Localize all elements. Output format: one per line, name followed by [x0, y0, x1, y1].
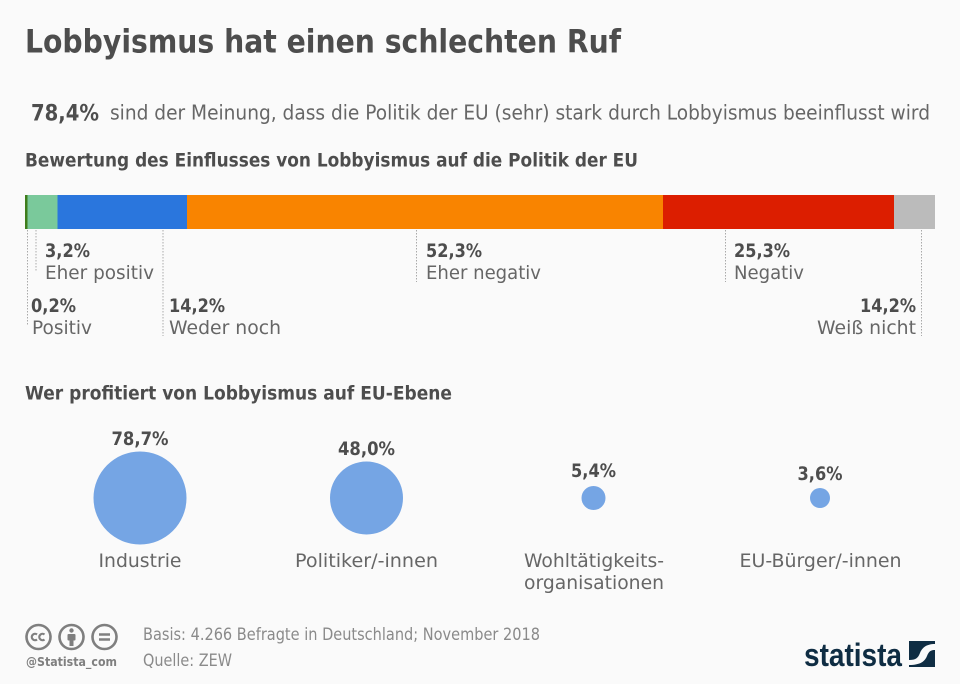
label: Eher negativ: Eher negativ: [426, 262, 541, 284]
icon: nd: [92, 625, 116, 649]
heading: who profits: Wer profitiert von Lobbyismus auf EU-Ebene: [25, 384, 452, 404]
bubble: Industrie: Industrie: [98, 550, 182, 572]
bubble: Industrie: [94, 428, 186, 572]
label: Negativ: 25,3%: [734, 240, 790, 262]
social handle: @Statista_com: [26, 655, 117, 670]
logo: statista: statista: [804, 637, 902, 673]
source note: Basis: 4.266 Befragte in Deutschland; November 2018: [143, 625, 540, 645]
bubble: Politiker/-innen: [295, 438, 438, 572]
label: Negativ: Negativ: [734, 262, 804, 284]
source note: Quelle: ZEW: [143, 651, 232, 671]
icon: creative commons licence: [26, 625, 116, 649]
source note: [143, 625, 540, 671]
bubble: Politiker/-innen: Politiker/-innen: [295, 550, 438, 572]
bubble: Wohltätigkeitsorganisationen: Wohltätigkeits-: [524, 550, 664, 572]
label: Negativ: [734, 240, 804, 284]
segment: Positiv: [25, 195, 28, 229]
icon: by: [60, 625, 84, 649]
bubble: Wohltätigkeitsorganisationen: 5,4%: [571, 460, 616, 482]
label: Weiß nicht: Weiß nicht: [817, 317, 916, 339]
segment: Eher negativ: [187, 195, 663, 229]
bubble: Industrie: 78,7%: [112, 428, 168, 450]
label: Weder noch: 14,2%: [169, 295, 225, 317]
label: Eher negativ: 52,3%: [426, 240, 482, 262]
key statement: [31, 100, 930, 126]
bubble: EU-Bürger/-innen: EU-Bürger/-innen: [740, 550, 902, 572]
key figure: 78,4%: [31, 102, 99, 126]
label: Weiß nicht: [817, 295, 916, 339]
bubble: Wohltätigkeitsorganisationen: organisationen: [524, 572, 664, 594]
stacked bar chart: [25, 195, 935, 229]
title: Lobbyismus hat einen schlechten Ruf: [25, 22, 622, 60]
label: Weiß nicht: 14,2%: [860, 295, 916, 317]
icon: cc: [26, 625, 50, 649]
segment: Weiß nicht: [894, 195, 935, 229]
heading: evaluation of influence: Bewertung des Einflusses von Lobbyismus auf die Politik der EU: [25, 150, 638, 172]
bubble: Politiker/-innen: 48,0%: [338, 438, 395, 460]
segment: Eher positiv: [28, 195, 58, 229]
label: Positiv: [31, 295, 92, 339]
label: Eher negativ: [426, 240, 541, 284]
bubble: EU-Bürger/-innen: 3,6%: [798, 463, 842, 485]
segment: Negativ: [663, 195, 894, 229]
icon: statista mark: [909, 641, 935, 667]
label: Weder noch: [169, 295, 281, 339]
label: Eher positiv: [45, 240, 154, 284]
label: Positiv: 0,2%: [31, 295, 76, 317]
bubble: Wohltätigkeitsorganisationen: [524, 460, 664, 594]
label: Eher positiv: Eher positiv: [45, 262, 154, 284]
label: Weder noch: Weder noch: [169, 317, 281, 339]
bubble: EU-Bürger/-innen: [740, 463, 902, 572]
label: Eher positiv: 3,2%: [45, 240, 90, 262]
segment: Weder noch: [58, 195, 187, 229]
label: Positiv: Positiv: [32, 317, 92, 339]
